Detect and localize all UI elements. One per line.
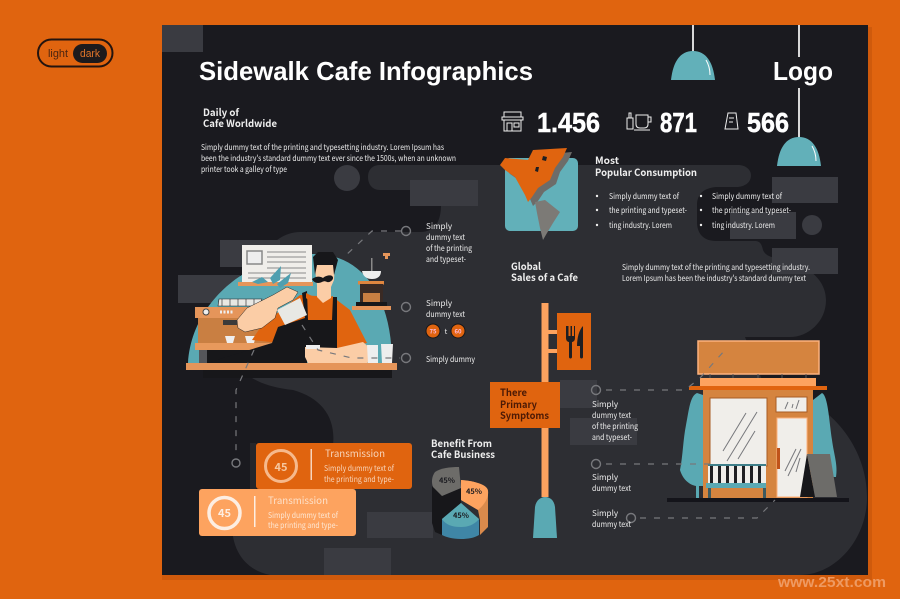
card: transmission light orange: the printing and type- [268, 520, 338, 531]
callout: barista middle: Simply [426, 298, 453, 309]
callout: barista top: of the printing [426, 243, 472, 254]
box: there primary symptoms: Symptoms [500, 407, 549, 422]
icon: a-board [725, 113, 738, 129]
text block: global sales: Sales of a Cafe [511, 269, 578, 284]
stat: cafes [502, 107, 600, 138]
callout: store top [592, 386, 638, 443]
badges [426, 324, 465, 338]
callout: barista middle [402, 298, 465, 338]
bullet list left: ting industry. Lorem [609, 220, 672, 231]
bullet list left: the printing and typeset- [609, 205, 687, 216]
bullet list right: ting industry. Lorem [712, 220, 775, 231]
callout: barista top: dummy text [426, 232, 465, 243]
stat: boards [725, 107, 789, 138]
icon: hanging lamp left [671, 25, 715, 80]
heading: benefit from cafe business: Cafe Business [431, 446, 495, 461]
plant [252, 266, 291, 288]
chart: 3d pie [432, 467, 488, 539]
chart: 3d pie: 45% [466, 486, 482, 497]
card: transmission orange: Simply dummy text of [324, 463, 394, 474]
grinder [352, 253, 391, 310]
map: americas [500, 148, 578, 240]
text block: most popular consumption: Popular Consumption [595, 164, 697, 179]
cups on counter [367, 344, 393, 363]
callout: barista top: Simply [426, 221, 453, 232]
callout: store middle: dummy text [592, 483, 631, 494]
callout: store top: and typeset- [592, 432, 632, 443]
card: transmission orange [250, 443, 412, 489]
badges: t [445, 327, 448, 337]
toggle: light dark: light [48, 48, 68, 60]
shop sign [698, 341, 819, 374]
sign: fork and knife [557, 313, 591, 370]
text block: daily of cafe worldwide: Cafe Worldwide [203, 115, 277, 130]
callout: store bottom: Simply [592, 508, 619, 519]
text block: daily of cafe worldwide: Simply dummy text of the printing and typesetting industry. Lorem Ipsum has [201, 142, 444, 153]
card: transmission light orange: 45 [218, 505, 231, 521]
post base [533, 497, 557, 538]
bullet list left [596, 191, 687, 231]
icon: hanging lamp right [777, 25, 821, 166]
arm with pitcher [237, 287, 298, 332]
callout: barista top [402, 221, 472, 265]
callout: barista bottom: Simply dummy [426, 354, 476, 365]
callout: barista bottom [402, 354, 476, 365]
illustration: storefront [667, 341, 849, 502]
callout: store bottom: dummy text [592, 519, 631, 530]
heading: benefit from cafe business: Benefit From [431, 435, 492, 450]
callout: barista top: and typeset- [426, 254, 466, 265]
title: Sidewalk Cafe Infographics [199, 56, 533, 86]
barista body [207, 252, 373, 363]
callout: store middle: Simply [592, 472, 619, 483]
text block: daily of cafe worldwide: Daily of [203, 104, 240, 119]
text block: daily of cafe worldwide: been the industry's standard dummy text ever since the 1500s, when an unknown [201, 153, 456, 164]
badges: 60 [454, 326, 462, 336]
toggle: light dark: dark [80, 48, 100, 60]
callout: store top: of the printing [592, 421, 638, 432]
box: there primary symptoms: Primary [500, 396, 537, 411]
bullet list left: Simply dummy text of [609, 191, 679, 202]
ground [667, 498, 849, 502]
chart: 3d pie: 45% [439, 475, 455, 486]
connector: store dashed lines [606, 350, 775, 518]
text block: global sales [511, 258, 810, 284]
illustration: barista [186, 245, 397, 378]
callout: store top: Simply [592, 399, 619, 410]
signpost [533, 303, 591, 538]
stat: cups [627, 107, 697, 138]
node: dashed line end [232, 459, 240, 467]
text block: global sales: Lorem Ipsum has been the industry's standard dummy text [622, 273, 806, 284]
panel: dark background [162, 25, 868, 575]
connector: barista dashed line [236, 231, 401, 458]
trees [680, 393, 837, 498]
stat: cafes: 1.456 [537, 107, 600, 138]
bench [706, 464, 766, 498]
icon: storefront [502, 112, 523, 131]
a-board [800, 454, 815, 497]
box: there primary symptoms [490, 382, 560, 428]
toggle: light dark [38, 40, 112, 66]
card: transmission orange: the printing and type- [324, 474, 394, 485]
bullet list right: the printing and typeset- [712, 205, 791, 216]
watermark: www.25xt.com [777, 575, 886, 591]
stat: cups: 871 [660, 107, 697, 138]
heading: benefit from cafe business [431, 435, 495, 461]
bullet list right: Simply dummy text of [712, 191, 782, 202]
callout: store bottom [592, 508, 636, 530]
card: transmission orange: 45 [275, 459, 287, 475]
card: transmission light orange: Simply dummy text of [268, 510, 338, 521]
callout: store middle [592, 460, 631, 494]
callout: barista middle: dummy text [426, 309, 465, 320]
card: transmission light orange: Transmission [268, 492, 328, 507]
icon: cup and bottle [627, 113, 651, 130]
badges: 75 [429, 326, 437, 336]
background squares [162, 25, 838, 575]
callout: store top: dummy text [592, 410, 631, 421]
text block: daily of cafe worldwide: printer took a galley of type [201, 164, 287, 175]
chart: 3d pie: 45% [453, 510, 469, 521]
card: transmission orange: Transmission [325, 445, 385, 460]
text block: global sales: Global [511, 258, 541, 273]
text block: daily of cafe worldwide [201, 104, 456, 175]
coffee machine [195, 299, 307, 363]
text block: most popular consumption: Most [595, 152, 620, 167]
head [315, 263, 335, 303]
box: there primary symptoms: There [500, 384, 527, 399]
logo: Logo [773, 56, 833, 86]
bullet list right [700, 191, 791, 231]
card: transmission light orange [199, 489, 356, 536]
menu paper on shelf [238, 245, 313, 286]
text block: most popular consumption [595, 152, 791, 231]
text block: global sales: Simply dummy text of the printing and typesetting industry. [622, 262, 810, 273]
shop body [703, 390, 813, 498]
stat: boards: 566 [747, 107, 789, 138]
